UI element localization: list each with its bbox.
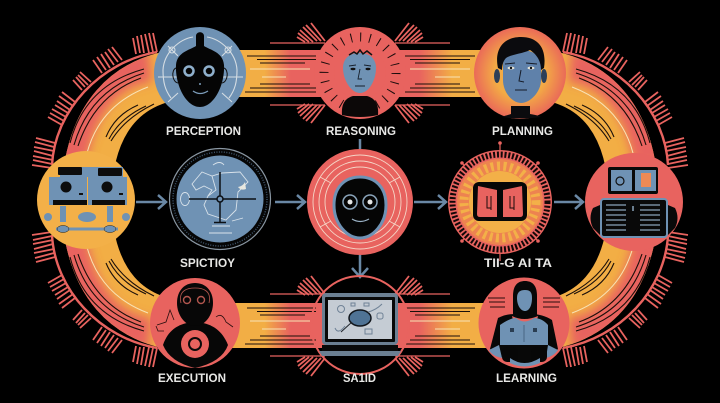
- flow band: top straight: [200, 23, 520, 123]
- icon: learning person: [478, 278, 570, 368]
- icon: laptop: [311, 276, 409, 374]
- flow band: top left arc: [32, 33, 200, 200]
- arrow: core down to laptop: [352, 255, 368, 277]
- icon: core face: [307, 149, 413, 255]
- label: learning: LEARNING: [496, 371, 557, 385]
- label: reasoning: REASONING: [326, 124, 396, 138]
- icon: planning portrait: [474, 27, 566, 119]
- icon: compass map: [170, 148, 270, 250]
- arrow: machine to compass: [136, 195, 166, 209]
- icon: reasoning face: [314, 27, 406, 119]
- flow band: top right arc: [520, 33, 688, 200]
- flow band: bottom straight: [195, 276, 525, 376]
- label: said: SA1ID: [343, 371, 376, 385]
- icon: perception robot head: [154, 27, 246, 119]
- icon: data book sunburst: [448, 141, 552, 261]
- icon: input machine: [37, 151, 135, 249]
- label: spictioy: SPICTIOY: [180, 256, 235, 270]
- label: planning: PLANNING: [492, 124, 553, 138]
- icon: dashboard console: [585, 153, 683, 251]
- label: execution: EXECUTION: [158, 371, 226, 385]
- flow band: bottom left arc: [32, 200, 200, 367]
- flow band: bottom right arc: [520, 200, 688, 367]
- arrow: data book to dashboard: [554, 195, 583, 209]
- arrow: reasoning to core stub: [359, 139, 361, 149]
- icon: execution robot: [150, 278, 240, 368]
- label: tii-g ai ta: TII-G AI TA: [484, 256, 552, 270]
- arrow: core to data book: [414, 195, 446, 209]
- label: perception: PERCEPTION: [166, 124, 241, 138]
- arrow: compass to core: [275, 195, 305, 209]
